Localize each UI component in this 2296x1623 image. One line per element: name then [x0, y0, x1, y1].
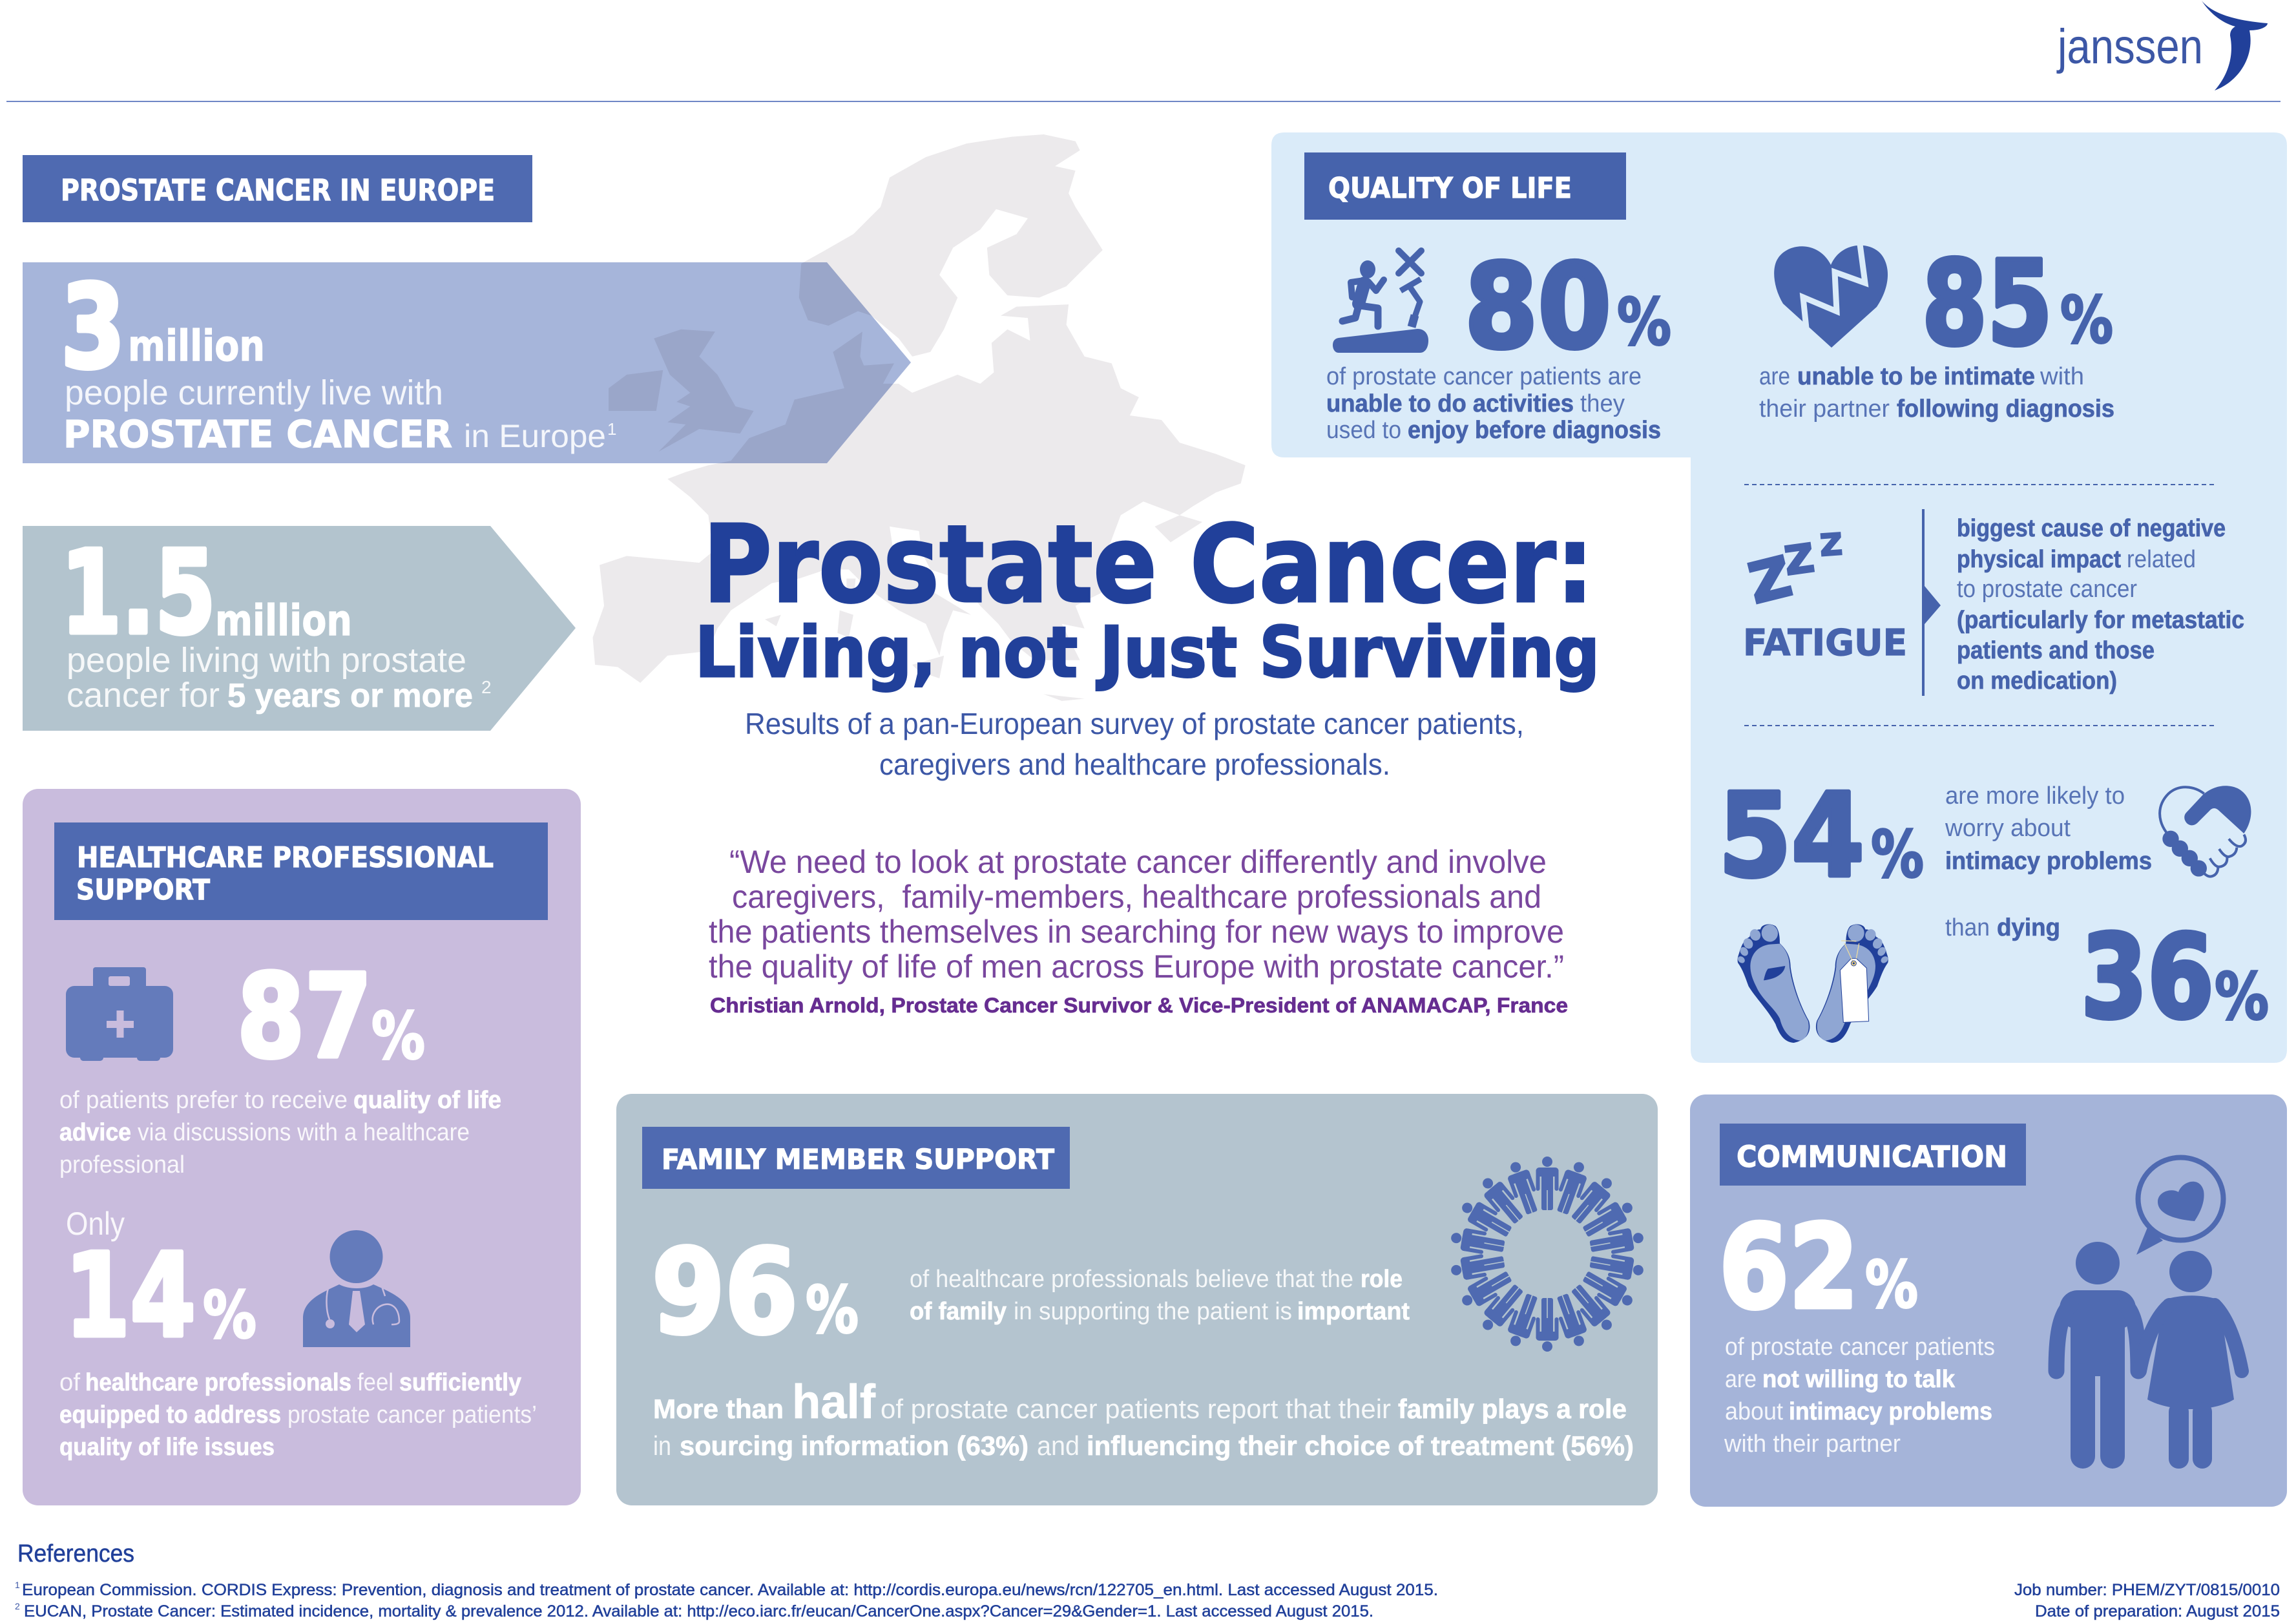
- section header: prostate cancer in Europe: [23, 155, 532, 222]
- quote: [709, 844, 1568, 1017]
- quote: Christian Arnold, Prostate Cancer Survivor & Vice-President of ANAMACAP, France: [710, 994, 1568, 1017]
- stat: 62%: %: [1865, 1247, 1918, 1323]
- logo: janssen: janssen: [2056, 19, 2203, 74]
- quote: caregivers, family-members, healthcare professionals and: [732, 879, 1541, 915]
- arrow panel: 1.5 million: 2: [481, 677, 492, 697]
- text: role of family: important: [1297, 1298, 1410, 1325]
- arrow panel: 3 million: people currently live with: [65, 373, 443, 412]
- stat: 96%: %: [806, 1272, 859, 1348]
- text: role of family: [910, 1266, 1410, 1325]
- heading: healthcare professional support: HEALTHCARE PROFESSIONAL: [77, 841, 494, 874]
- job number and date: Job number: PHEM/ZYT/0815/0010: [2014, 1581, 2280, 1599]
- panel: quality of life: [1271, 132, 2287, 1063]
- text: healthcare professionals: sufficiently: [399, 1369, 521, 1396]
- text: fatigue details: on medication): [1957, 667, 2117, 695]
- references: [15, 1540, 1438, 1620]
- arrow panel: 3 million: [23, 260, 911, 463]
- text: unable to do activities: they: [1580, 390, 1625, 417]
- heading: quality of life: QUALITY OF LIFE: [1328, 172, 1572, 205]
- heading: communication: COMMUNICATION: [1737, 1140, 2007, 1174]
- text: healthcare professionals: feel: [357, 1369, 393, 1396]
- text: unable to be intimate: their partner: [1759, 395, 1890, 423]
- text: not willing to talk: are: [1725, 1366, 1757, 1393]
- text: more than half: More than: [653, 1394, 784, 1424]
- stat: 85%: 85: [1922, 236, 2052, 372]
- text: unable to be intimate: with: [2040, 363, 2084, 390]
- text: more than half: sourcing information (63%): [680, 1430, 1028, 1461]
- text: role of family: of family: [910, 1298, 1007, 1325]
- panel: communication: [1690, 1094, 2287, 1507]
- icon: ring of people: [1449, 1157, 1645, 1352]
- icon: broken heart: [1774, 244, 1888, 348]
- text: unable to do activities: unable to do activities: [1326, 390, 1574, 417]
- stat: only 14%: 14: [65, 1229, 196, 1363]
- label: fatigue: FATIGUE: [1743, 622, 1907, 664]
- references: European Commission. CORDIS Express: Prevention, diagnosis and treatment of prostate cancer. Available at: http://cordis.europa.eu/news/rcn/122705_en.html. Last accessed August 2015.: [22, 1581, 1438, 1599]
- icon: feet with toe tag: [1737, 923, 1890, 1043]
- text: more than half: half: [792, 1375, 875, 1429]
- stat: 87%: %: [371, 998, 425, 1074]
- arrow panel: 1.5 million: [23, 526, 576, 731]
- text: not willing to talk: not willing to talk: [1762, 1366, 1956, 1393]
- stat: 36%: 36: [2081, 910, 2214, 1044]
- text: unable to be intimate: are: [1759, 363, 1790, 390]
- quote: the patients themselves in searching for new ways to improve: [709, 914, 1564, 950]
- icon: zzz sleep letters: [1736, 518, 1844, 622]
- text: patient preference: via discussions with a healthcare: [138, 1119, 470, 1146]
- icon: zzz sleep letters: z: [1779, 521, 1819, 589]
- text: healthcare professionals: [59, 1369, 537, 1461]
- text: unable to be intimate: unable to be intimate: [1797, 363, 2035, 390]
- text: patient preference: of patients prefer to receive: [59, 1087, 348, 1114]
- stat: 62%: 62: [1719, 1200, 1859, 1334]
- text: intimacy problems: intimacy problems: [1945, 848, 2152, 875]
- text: fatigue details: to prostate cancer: [1957, 576, 2137, 603]
- stat: 54%: %: [1871, 817, 1924, 892]
- text: unable to do activities: of prostate cancer patients are: [1326, 363, 1642, 390]
- arrow panel: 1.5 million: 5 years or more: [227, 677, 473, 715]
- header rule: [6, 101, 2280, 102]
- title: Living, not Just Surviving: [695, 613, 1600, 693]
- stat: 85%: %: [2060, 282, 2113, 358]
- text: not willing to talk: with their partner: [1724, 1430, 1901, 1458]
- subtitle: Results of a pan-European survey of prostate cancer patients,: [745, 707, 1524, 740]
- subtitle: [745, 707, 1524, 781]
- stat: 80%: %: [1617, 284, 1671, 360]
- stat: 36%: %: [2215, 959, 2269, 1034]
- text: unable to be intimate: following diagnosis: [1897, 395, 2114, 423]
- arrow panel: 1.5 million: 1.5: [61, 526, 216, 660]
- arrow panel: 3 million: million: [128, 321, 265, 371]
- text: not willing to talk: about: [1725, 1398, 1783, 1425]
- arrow panel: 1.5 million: people living with prostate: [67, 641, 466, 680]
- text: patient preference: [59, 1087, 501, 1178]
- text: healthcare professionals: equipped to address: [59, 1401, 281, 1429]
- text: than dying: dying: [1997, 914, 2060, 941]
- heading: healthcare professional support: SUPPORT: [76, 874, 210, 906]
- heading: healthcare professional support: [54, 822, 548, 920]
- text: more than half: and: [1037, 1430, 1080, 1461]
- stat: 96%: 96: [652, 1225, 798, 1360]
- text: than dying: than: [1945, 914, 1990, 941]
- text: more than half: [653, 1375, 1634, 1461]
- text: unable to do activities: used to: [1326, 417, 1401, 444]
- panel: healthcare professional support: [23, 789, 581, 1505]
- text: role of family: in supporting the patient is: [1014, 1298, 1292, 1325]
- arrow panel: 3 million: in Europe: [464, 418, 606, 454]
- text: role of family: role: [1361, 1266, 1403, 1293]
- references: 1: [15, 1580, 20, 1590]
- icon: zzz sleep letters: z: [1817, 518, 1844, 567]
- text: role of family: of healthcare professionals believe that the: [910, 1266, 1353, 1293]
- title: [695, 503, 1600, 693]
- panel: family member support: [616, 1094, 1658, 1505]
- text: more than half: of prostate cancer patients report that their: [881, 1394, 1391, 1424]
- arrow panel: 1.5 million: million: [215, 596, 352, 645]
- quote: the quality of life of men across Europe with prostate cancer.”: [709, 948, 1564, 985]
- text: not willing to talk: of prostate cancer patients: [1725, 1334, 1995, 1361]
- stat: 80%: 80: [1465, 240, 1611, 375]
- heading: family member support: FAMILY MEMBER SUPPORT: [662, 1144, 1055, 1176]
- text: fatigue details: biggest cause of negative: [1957, 515, 2226, 542]
- text: intimacy problems: worry about: [1945, 815, 2071, 842]
- text: fatigue details: [1957, 515, 2244, 695]
- heading: communication: [1720, 1124, 2026, 1186]
- text: fatigue details: patients and those: [1957, 637, 2155, 664]
- heading: family member support: [642, 1127, 1070, 1189]
- arrow panel: 1.5 million: cancer for: [67, 676, 220, 715]
- subtitle: caregivers and healthcare professionals.: [879, 748, 1390, 781]
- text: unable to be intimate: [1759, 363, 2114, 423]
- text: unable to do activities: [1326, 363, 1661, 444]
- text: patient preference: quality of life: [353, 1087, 501, 1114]
- text: healthcare professionals: prostate cancer patients’: [287, 1401, 537, 1429]
- section header: prostate cancer in Europe: PROSTATE CANCER IN EUROPE: [61, 173, 495, 207]
- heading: quality of life: [1304, 152, 1626, 220]
- stat: 87%: 87: [237, 950, 372, 1084]
- references: EUCAN, Prostate Cancer: Estimated incidence, mortality & prevalence 2012. Available at: http://eco.iarc.fr/eucan/CancerOne.aspx?Cancer=29&Gender=1. Last accessed August 2015.: [24, 1602, 1373, 1620]
- job number and date: Date of preparation: August 2015: [2035, 1602, 2280, 1620]
- quote: “We need to look at prostate cancer differently and involve: [729, 844, 1547, 880]
- text: fatigue details: related: [2127, 546, 2196, 573]
- text: fatigue details: (particularly for metastatic: [1957, 607, 2244, 634]
- icon: runner on treadmill: [1333, 251, 1428, 353]
- background map of Europe: [593, 134, 1246, 701]
- text: more than half: influencing their choice of treatment (56%): [1087, 1430, 1634, 1461]
- text: intimacy problems: [1945, 782, 2152, 875]
- icon: medical bag: [66, 967, 173, 1061]
- text: healthcare professionals: healthcare professionals: [85, 1369, 351, 1396]
- job number and date: [2014, 1581, 2280, 1620]
- arrow panel: 3 million: PROSTATE CANCER: [63, 412, 452, 456]
- text: not willing to talk: [1724, 1334, 1995, 1458]
- references: 2: [15, 1601, 20, 1611]
- text: patient preference: advice: [59, 1119, 131, 1146]
- text: healthcare professionals: of: [59, 1369, 80, 1396]
- text: fatigue details: physical impact: [1957, 546, 2121, 573]
- text: intimacy problems: are more likely to: [1945, 782, 2125, 810]
- references: References: [17, 1540, 134, 1567]
- divider arrow: [1922, 509, 1941, 696]
- arrow panel: 3 million: 3: [61, 260, 125, 394]
- text: not willing to talk: intimacy problems: [1789, 1398, 1992, 1425]
- title: Prostate Cancer:: [703, 503, 1594, 627]
- logo: janssen: [2056, 1, 2268, 90]
- stat: only 14%: %: [203, 1277, 256, 1353]
- arrow panel: 3 million: 1: [607, 419, 616, 439]
- text: more than half: in: [653, 1430, 671, 1461]
- icon: couple with speech bubble: [2056, 1158, 2242, 1469]
- text: more than half: family plays a role: [1398, 1394, 1627, 1424]
- icon: zzz sleep letters: z: [1736, 525, 1800, 622]
- text: unable to do activities: enjoy before diagnosis: [1408, 417, 1661, 444]
- icon: doctor: [303, 1230, 410, 1347]
- stat: 54%: 54: [1718, 769, 1864, 903]
- icon: handshake heart: [2160, 786, 2251, 877]
- text: patient preference: professional: [59, 1151, 185, 1178]
- stat: only 14%: Only: [66, 1206, 125, 1242]
- text: healthcare professionals: quality of life issues: [59, 1434, 275, 1461]
